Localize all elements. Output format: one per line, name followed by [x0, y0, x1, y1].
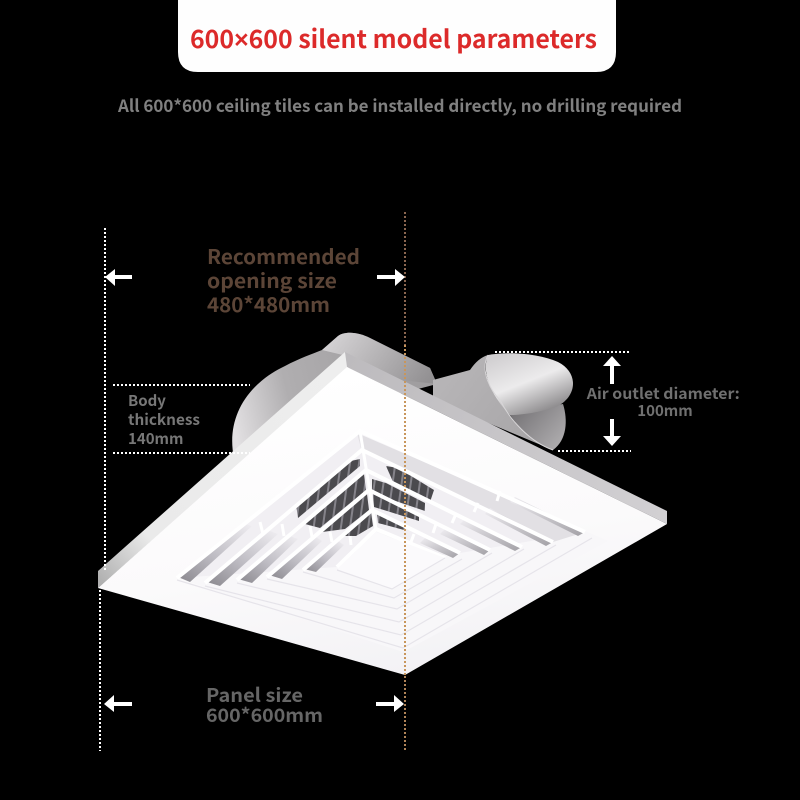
air outlet pipe: [433, 355, 553, 450]
left slot shadows: [180, 527, 344, 586]
recommended opening size label: 480*480mm: [207, 289, 330, 318]
body thickness label: 140mm: [128, 428, 183, 449]
panel face: [98, 367, 667, 675]
panel size label: Panel size: [206, 681, 303, 708]
banner background: [178, 0, 616, 72]
grille slats: [177, 431, 585, 583]
arrow: panel left: [104, 695, 132, 712]
right slot shadows: [420, 497, 583, 558]
air outlet diameter label: Air outlet diameter:: [586, 383, 740, 404]
arrow: panel right: [376, 695, 404, 712]
slat spine and ribs: [260, 431, 500, 545]
panel rim right: [345, 352, 667, 524]
fan blades seen through grille: [296, 459, 434, 536]
title banner: [178, 0, 616, 72]
lower faint rings: [177, 538, 592, 648]
rear motor box: [322, 333, 437, 384]
panel rim left: [98, 352, 349, 588]
arrow: outlet down: [603, 419, 621, 446]
arrow: opening left: [105, 269, 132, 286]
air outlet lower inner: [508, 404, 566, 450]
recommended opening size label: Recommended: [207, 241, 360, 270]
title text: 600×600 silent model parameters: [190, 20, 597, 56]
product photo: ceiling ventilation fan: [98, 333, 667, 675]
body thickness label: Body: [128, 390, 166, 411]
air outlet rim line: [485, 355, 553, 450]
grille: [177, 431, 608, 652]
dotted guide lines: [100, 212, 631, 751]
center square: [340, 538, 434, 570]
air outlet opening: [486, 353, 573, 415]
upper grille bands: [177, 433, 585, 578]
body thickness label: thickness: [128, 409, 200, 430]
rear round duct housing: [232, 333, 437, 458]
recommended opening size label: opening size: [207, 265, 337, 294]
panel size label: 600*600mm: [206, 701, 323, 728]
subtitle: All 600*600 ceiling tiles can be installed directly, no drilling required: [117, 92, 682, 117]
arrow: outlet up: [603, 356, 621, 384]
grille base: [177, 431, 608, 652]
air outlet diameter label: 100mm: [637, 400, 693, 421]
arrow: opening right: [377, 269, 405, 286]
